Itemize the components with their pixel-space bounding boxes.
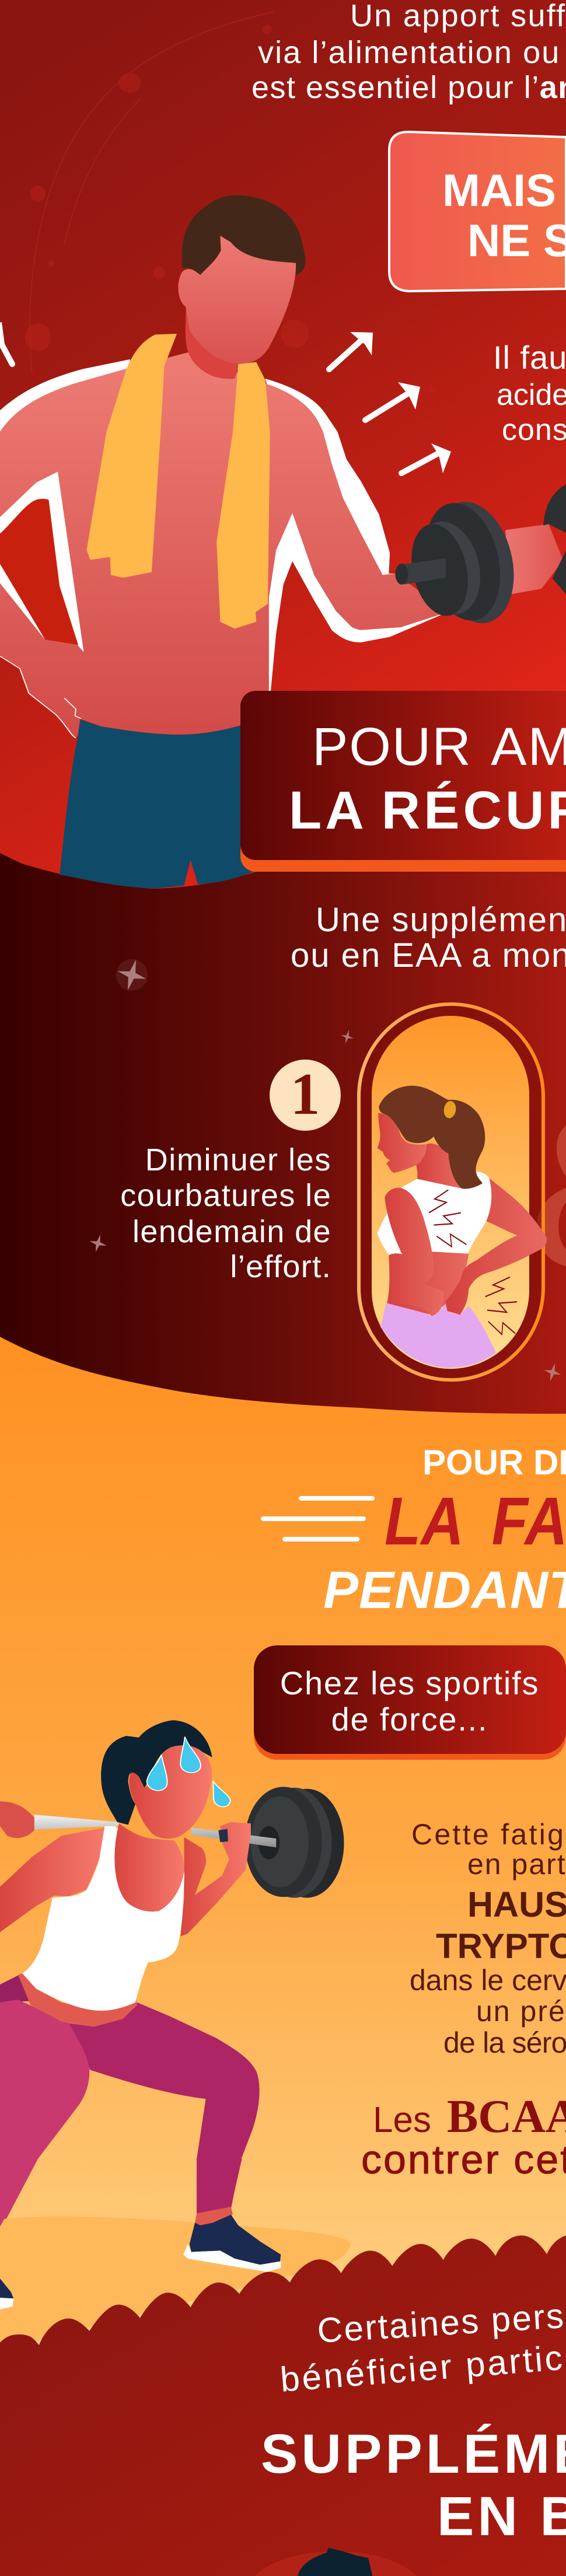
torso and arms — [0, 352, 448, 738]
towel right strip — [216, 362, 270, 628]
text: tryptophane explanation — [410, 1818, 566, 2059]
face — [178, 236, 296, 363]
white tank top — [22, 1826, 184, 2011]
far shoe — [0, 2278, 14, 2309]
neck and upper back — [416, 1144, 462, 1190]
intro text — [251, 0, 566, 105]
heading: pour diminuer la fatigue pendant — [261, 1443, 566, 1620]
neck shadow — [186, 307, 240, 379]
towel left strip — [86, 334, 177, 578]
lavender shorts — [380, 1303, 496, 1368]
panel: bottom scalloped red section — [0, 2235, 566, 2576]
panel: dark recovery section background — [0, 840, 566, 1418]
glow behind head — [246, 2551, 426, 2576]
chest skin — [114, 1823, 184, 1911]
text: diminuer les courbatures: l’effort. — [230, 1249, 331, 1284]
pain bolts — [429, 1190, 517, 1334]
white top — [378, 1172, 491, 1255]
near arm — [0, 1827, 104, 1932]
barbell bar — [34, 1815, 276, 1847]
illustration: man with towel and dumbbell — [0, 195, 566, 888]
callout: chez les sportifs de force — [254, 1645, 566, 1760]
hair — [101, 1720, 212, 1825]
leggings — [69, 2002, 260, 2214]
icon: decorative sparkle stars — [88, 956, 564, 1383]
ponytail hair — [379, 1086, 485, 1189]
text: diminuer les courbatures: courbatures le — [120, 1178, 331, 1213]
near leg and shoe — [0, 2159, 281, 2272]
heading: supplementation en bcaa — [261, 2423, 566, 2547]
near hand — [0, 1801, 34, 1838]
illustration: ground and shoes — [0, 2159, 350, 2350]
hair — [182, 195, 305, 275]
number badge 1: 1 — [291, 1061, 320, 1127]
illustration: woman squatting with barbell — [0, 1720, 344, 2231]
hair tie — [442, 1098, 458, 1121]
left shoulder outline — [0, 359, 130, 446]
face — [378, 1113, 427, 1173]
dumbbell — [395, 484, 566, 627]
icon: arrows pointing outward — [0, 322, 451, 473]
far arm — [445, 1178, 547, 1315]
white body outline — [265, 379, 448, 691]
barbell plate — [244, 1787, 344, 1898]
text: supplementation benefits — [291, 901, 566, 974]
text: les bcaa peuvent contrer: Les — [373, 2100, 431, 2140]
arm gap with white edge — [0, 471, 84, 652]
speed lines — [261, 1496, 375, 1542]
icon: capsule frame — [359, 1004, 543, 1380]
decorative glowing particles — [25, 12, 436, 393]
text: il faut des acides amines — [493, 339, 566, 447]
sweat drops — [147, 1737, 230, 1807]
waist — [387, 1252, 469, 1315]
thin hand outline — [0, 656, 81, 738]
text: certaines personnes — [279, 2281, 566, 2399]
hand grip — [218, 1829, 228, 1842]
text: diminuer les courbatures: lendemain de — [132, 1214, 331, 1249]
head of next figure — [298, 2548, 372, 2576]
trousers — [60, 719, 260, 888]
text: diminuer les courbatures: Diminuer les — [145, 1142, 331, 1177]
text: les bcaa peuvent contrer — [361, 2091, 566, 2182]
illustration: woman with back pain — [378, 1086, 547, 1368]
callout: pour ameliorer la recuperation — [240, 691, 566, 872]
callout: chez les sportifs de force: Chez les sportifs — [280, 1665, 539, 1701]
callout: chez les sportifs de force: de force... — [331, 1701, 488, 1738]
number badge 1 — [270, 1060, 341, 1131]
face — [129, 1745, 212, 1838]
panel: red top section background — [0, 0, 566, 889]
near arm — [385, 1188, 444, 1316]
panel: orange fatigue section background — [0, 1337, 566, 2369]
waistband — [18, 1973, 137, 2026]
callout: mais ils ne suffisent pas — [389, 132, 566, 291]
text: diminuer les courbatures — [120, 1142, 331, 1284]
far arm — [180, 1822, 251, 1937]
legs left darker — [0, 1973, 31, 2118]
